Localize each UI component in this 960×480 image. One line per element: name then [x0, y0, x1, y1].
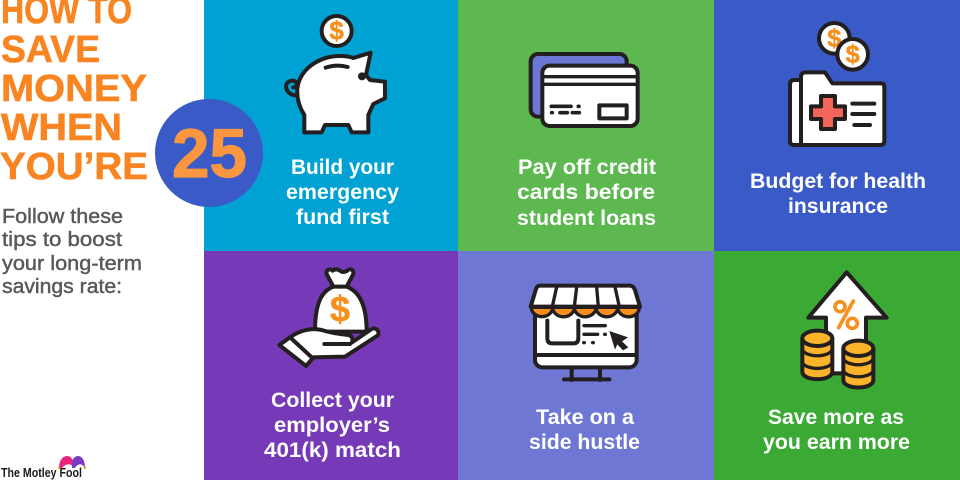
badge: age 25 circle: [155, 99, 263, 207]
label: fund first: [296, 206, 389, 229]
icon: medical folder with coins: $: [827, 24, 841, 52]
intro text: your long-term: [2, 253, 142, 275]
label: employer’s: [274, 414, 390, 437]
label: Save more as: [768, 406, 904, 429]
label: side hustle: [529, 431, 640, 454]
icon: medical folder with coins: [790, 23, 884, 145]
intro text: Follow these: [2, 206, 123, 228]
icon: piggy bank with coin: $: [329, 15, 344, 45]
intro text: [2, 206, 142, 298]
label: [517, 156, 656, 230]
label: [286, 156, 399, 229]
label: insurance: [788, 195, 888, 218]
label: cards before: [517, 181, 655, 204]
panel: left intro column: [0, 0, 204, 480]
label: emergency: [286, 181, 399, 204]
icon: arrow with percent and coin stacks: [802, 272, 887, 387]
icon: online storefront monitor: [531, 286, 640, 380]
title: [0, 0, 148, 188]
badge: age 25 circle: 25: [172, 115, 247, 192]
label: Take on a: [536, 406, 634, 429]
icon: hand holding money bag: $: [330, 288, 350, 329]
intro text: tips to boost: [2, 229, 122, 251]
intro text: savings rate:: [2, 276, 122, 298]
title: SAVE: [1, 29, 100, 71]
label: [750, 170, 926, 218]
title: MONEY: [1, 68, 147, 110]
title: WHEN: [1, 107, 122, 149]
icon: medical folder with coins: $: [846, 40, 860, 68]
label: [529, 406, 640, 454]
label: 401(k) match: [264, 439, 401, 462]
label: [264, 389, 401, 462]
label: Collect your: [271, 389, 394, 412]
icon: piggy bank with coin: [286, 15, 385, 132]
icon: credit cards: [531, 54, 638, 126]
panel: save more as you earn more: [714, 251, 960, 480]
panel: pay off credit cards: [458, 0, 714, 251]
title: YOU’RE: [0, 146, 148, 188]
label: Build your: [291, 156, 394, 179]
logo: The Motley Fool: The Motley Fool: [1, 465, 82, 480]
panel: collect your 401(k) match: [204, 251, 458, 480]
label: you earn more: [763, 431, 910, 454]
label: student loans: [517, 207, 656, 230]
label: Budget for health: [750, 170, 926, 193]
panel: budget for health insurance: [714, 0, 960, 251]
label: Pay off credit: [518, 156, 656, 179]
panel: take on a side hustle: [458, 251, 714, 480]
icon: hand holding money bag: [279, 269, 379, 366]
label: [763, 406, 910, 454]
logo: The Motley Fool: [1, 456, 86, 480]
panel: build your emergency fund first: [204, 0, 458, 251]
